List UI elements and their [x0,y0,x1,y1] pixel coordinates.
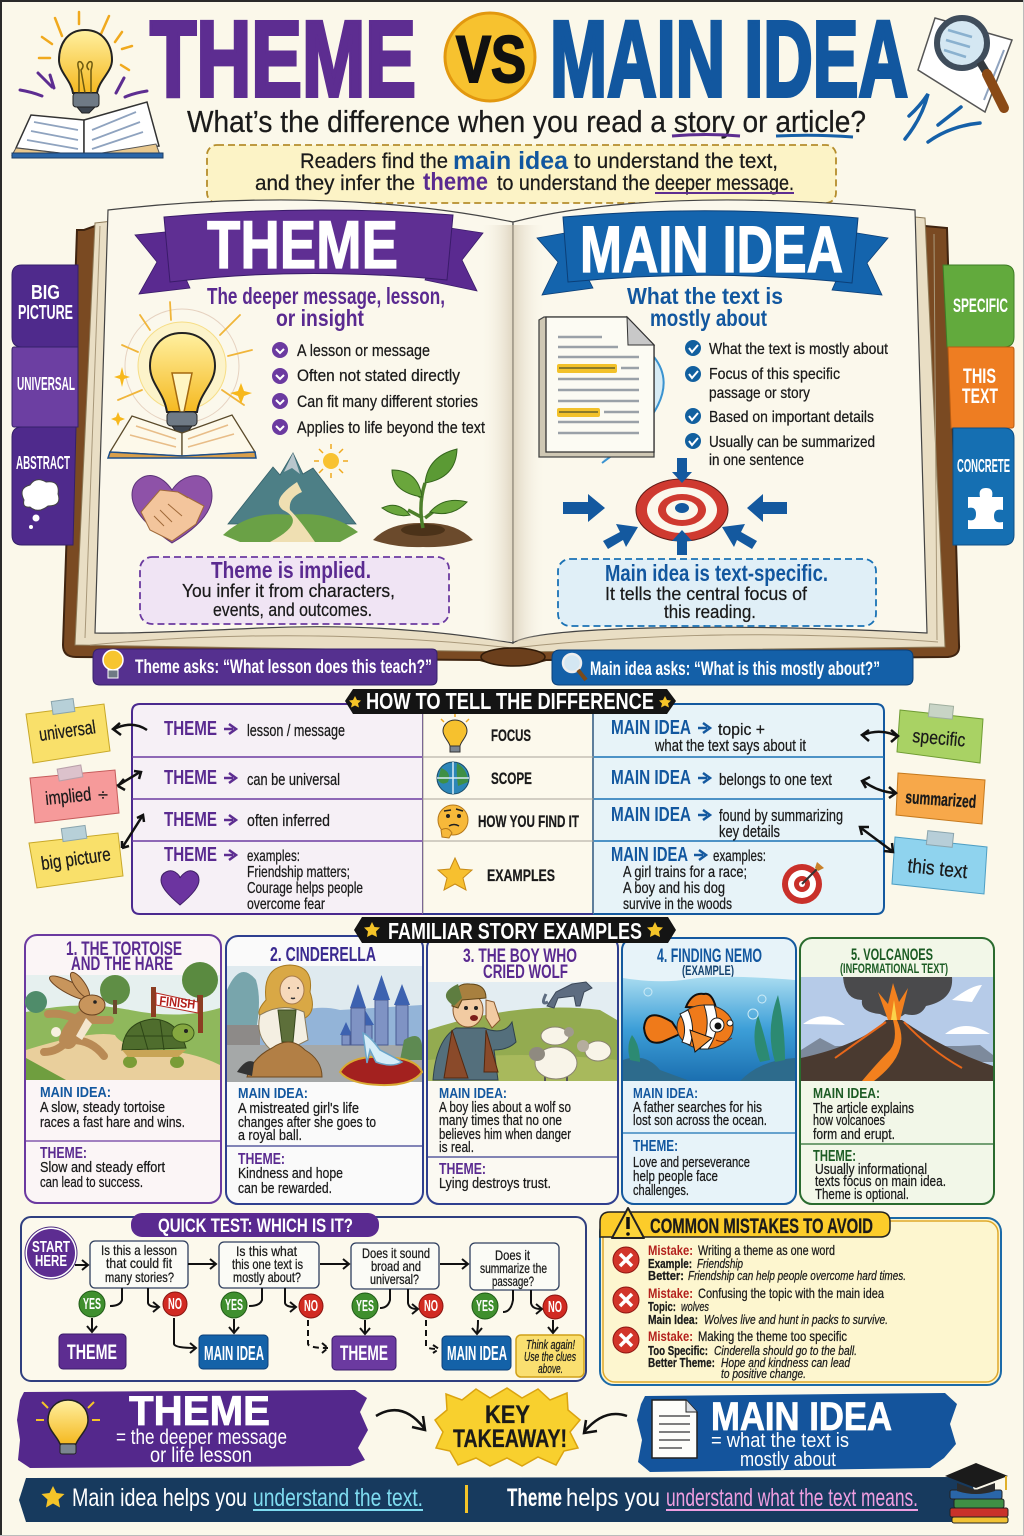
row: focus: FOCUS [491,726,531,745]
panel: card 1 tortoise and hare [25,935,221,1203]
question 4: Does it [495,1247,530,1263]
badge: key takeaway [435,1388,580,1466]
callout: readers find: Readers find the [300,150,448,173]
mistake 3: Too Specific: [648,1343,708,1358]
icon: glowing lightbulb on book [108,302,256,458]
banner: main idea takeaway [637,1393,957,1472]
question 3 [351,1243,439,1289]
checklist: theme: A lesson or message [297,341,430,360]
text: Lying destroys trust. [439,1175,551,1192]
tab: big picture: BIG [31,282,60,304]
mistake 3: to positive change. [721,1366,806,1381]
mistake 1: Writing a theme as one word [698,1242,835,1258]
text: changes after she goes to [238,1114,376,1131]
heading: 2. CINDERELLA [270,944,376,966]
callout: main idea is text-specific [558,559,876,626]
yes no badges: YES [225,1297,243,1314]
callout: theme is implied: events, and outcomes. [213,600,372,620]
row: examples: examples: [247,848,300,865]
question 2: Is this what [236,1243,297,1259]
badge: key takeaway: TAKEAWAY! [453,1425,567,1453]
text: Usually informational [815,1161,927,1178]
book clasp [481,648,545,666]
panel: card 5 volcanoes [800,938,994,1204]
mistake 1: Example: [648,1256,692,1271]
panel: common mistakes [600,1208,1001,1385]
text: THEME: [813,1148,856,1165]
checklist: theme: Applies to life beyond the text [297,418,485,437]
icon: highlighted document [539,317,664,463]
bottom bar: summary [19,1477,977,1522]
results: THEME [67,1341,117,1364]
mistake 2: Confusing the topic with the main idea [698,1285,884,1301]
text [227,1085,422,1197]
text: THEME: [439,1161,486,1178]
text: MAIN IDEA: [439,1085,507,1102]
text: A boy lies about a wolf so [439,1099,571,1116]
tab: concrete [953,428,1014,545]
callout: readers find: main idea [453,147,569,175]
callout: main idea is text-specific: Main idea is text-specific. [605,560,828,586]
heading: deeper message [207,283,445,331]
icon: bulb [36,1400,100,1454]
text [26,1084,220,1191]
checklist: theme: Often not stated directly [297,366,460,385]
text: races a fast hare and wins. [40,1114,185,1131]
tabs: right side [943,265,1014,545]
mistake 3: Better Theme: [648,1355,715,1370]
row: scope: THEME [164,767,217,789]
bottom bar: summary: Theme [507,1484,562,1512]
row: scope [164,762,832,794]
checklist: main idea: Usually can be summarized [709,434,875,451]
text [623,1085,795,1199]
ribbon: THEME [135,207,483,294]
text: THEME: [633,1138,678,1155]
sticky: this text: this text [906,855,969,883]
callout: readers find: to understand the [497,172,650,195]
badge: VS: VS [456,22,526,96]
text: Slow and steady effort [40,1159,166,1176]
icon: magnifying glass over paper [918,18,1012,112]
callout: theme is implied [140,557,449,624]
yes no badges: NO [304,1298,318,1315]
text: can be rewarded. [238,1180,332,1197]
banner: theme takeaway: or life lesson [150,1444,252,1467]
panel: main idea page [537,211,888,626]
tab: this text [948,347,1014,428]
text: A father searches for his [633,1099,762,1116]
text: The article explains [813,1100,914,1117]
text [801,1085,993,1203]
text: MAIN IDEA: [238,1085,308,1102]
row: focus [164,714,806,755]
heading: what the text is: mostly about [650,305,767,331]
table background [132,704,423,914]
callout: theme is implied: You infer it from characters, [182,581,395,601]
row: examples: MAIN IDEA [611,844,688,866]
heading: deeper message: or insight [276,305,364,331]
sticky: specific: specific [912,726,966,752]
start here [25,1227,77,1279]
panel: open book [63,200,959,665]
callout: theme is implied: Theme is implied. [211,557,371,583]
arrow: theme to takeaway [376,1410,425,1430]
row: how you find it: MAIN IDEA [611,804,691,826]
question 2: mostly about? [233,1269,301,1285]
panel: theme page [108,207,485,624]
mistake 3 [613,1327,857,1381]
heading: what the text is [627,283,783,331]
text: texts focus on main idea. [815,1173,946,1190]
text: A mistreated girl's life [238,1100,359,1117]
heading [66,939,182,975]
row: scope: MAIN IDEA [611,767,691,789]
row: how you find it: often inferred [247,811,330,830]
banner: main idea takeaway: mostly about [740,1449,836,1471]
heading: 5. VOLCANOES [851,945,933,964]
bar: theme asks [93,649,437,685]
bottom bar: summary: understand the text. [253,1484,423,1512]
row: focus: what the text says about it [654,736,806,755]
question 4: summarize the [480,1260,547,1276]
row: examples: overcome fear [247,896,326,913]
callout: readers find: deeper message. [655,172,794,195]
question 2: this one text is [232,1256,303,1272]
results: MAIN IDEA [447,1343,507,1365]
heading: what the text is: What the text is [627,283,783,309]
checklist: main idea: in one sentence [709,452,804,469]
results: THEME [340,1342,388,1365]
sticky: big picture [29,825,123,888]
panel: quick test flowchart [21,1213,586,1381]
mistake 1: Friendship [697,1256,743,1271]
checklist: main idea: Based on important details [709,409,874,426]
question 3: Does it sound [362,1245,430,1261]
banner: theme takeaway: THEME [129,1387,270,1434]
text: believes him when danger [439,1126,571,1143]
arrows: table to right notes [860,730,898,852]
row: how you find it: HOW YOU FIND IT [478,812,579,831]
icon: sprout [373,449,473,547]
row: how you find it [164,804,843,841]
heading: 4. FINDING NEMO [657,946,762,967]
checklist: main idea: passage or story [709,385,810,402]
row: examples: examples: [713,848,766,865]
heading: quick test: QUICK TEST: WHICH IS IT? [158,1216,353,1237]
notes: left sticky notes [26,699,123,888]
question 2 [219,1242,319,1288]
heading [657,946,762,978]
checklist: theme [272,341,485,437]
mistake 2: Wolves live and hunt in packs to survive. [704,1312,888,1327]
subtitle: What’s the difference when you read a story or article? [187,104,866,139]
callout: readers find [207,145,836,203]
text: THEME: [238,1151,285,1168]
illustration: cinderella, castle and slipper [227,965,422,1085]
text: Love and perseverance [633,1154,750,1171]
callout: readers find: theme [423,168,488,196]
row: how you find it: THEME [164,809,217,831]
results: Use the clues [524,1349,576,1364]
icon: target with arrows [563,458,787,555]
banner: main idea takeaway: = what the text is [711,1430,849,1452]
banner: theme takeaway [17,1387,368,1468]
tab: universal: UNIVERSAL [17,374,75,394]
text: a royal ball. [238,1127,302,1144]
icon: mountain path and sun [223,444,358,542]
text: is real. [439,1139,474,1156]
mistake 1: Mistake: [648,1242,693,1258]
text: form and erupt. [813,1126,895,1143]
tab: this text: THIS [963,365,996,388]
tab: this text: TEXT [962,385,998,408]
sticky: universal: universal [38,717,97,746]
yes no badges: NO [424,1298,438,1315]
icon: document [652,1400,697,1458]
arrows: left notes to table [113,723,147,848]
sticky: summarized: summarized [905,787,977,812]
page stacks [75,209,945,652]
question 1: many stories? [105,1269,174,1285]
checklist: theme: Can fit many different stories [297,392,478,411]
book cover [63,226,959,665]
row: examples: THEME [164,844,217,866]
illustration: hare and tortoise race: FINISH [159,993,196,1012]
heading: common mistakes [600,1208,890,1238]
heading: (INFORMATIONAL TEXT) [840,960,948,976]
mistake 3: Cinderella should go to the ball. [714,1343,857,1358]
question 1: that could fit [106,1255,172,1271]
bar: main idea asks [552,650,913,685]
bottom bar: summary: helps you [566,1484,660,1512]
heading [463,946,577,983]
heading: 1. THE TORTOISE [66,939,182,960]
mistake 2: Topic: [648,1299,676,1314]
sticky: this text [892,831,987,894]
question 4: passage? [492,1273,534,1289]
results: Think again! [526,1337,575,1352]
illustration: hare and tortoise race [25,962,220,1080]
mistake 2: Mistake: [648,1285,693,1301]
banner: theme takeaway: = the deeper message [116,1426,287,1449]
arrow: main idea to takeaway [584,1414,627,1433]
mistake 3: Mistake: [648,1328,693,1344]
text: MAIN IDEA: [40,1084,111,1101]
mistake 2: wolves [681,1299,709,1314]
text: MAIN IDEA: [633,1085,698,1102]
callout: readers find: and they infer the [255,172,415,195]
row: how you find it: key details [719,822,780,841]
flow arrows [75,1259,558,1353]
panel: card 4 finding nemo [622,938,796,1204]
decorative blue strokes [905,94,980,142]
heading: 3. THE BOY WHO [463,946,577,967]
ribbon: MAIN IDEA: MAIN IDEA [580,212,843,286]
row: how you find it: found by summarizing [719,806,843,825]
yes no badges: YES [356,1298,374,1315]
heading: familiar story examples: FAMILIAR STORY EXAMPLES [388,918,642,944]
tab: big picture: PICTURE [18,302,73,324]
checklist: main idea [685,340,888,469]
checklist: main idea: Focus of this specific [709,366,840,383]
left page [95,200,513,643]
text: how volcanoes [813,1112,885,1129]
yes no badges: NO [168,1296,182,1313]
callout: main idea is text-specific: It tells the central focus of [605,584,808,604]
text [428,1085,617,1192]
text: many times that no one [439,1112,562,1129]
callout: main idea is text-specific: this reading. [664,602,756,622]
tab: universal [12,347,78,427]
text: A slow, steady tortoise [40,1099,165,1116]
question 3: universal? [370,1271,419,1287]
heading: AND THE HARE [71,954,173,975]
mistake 1 [613,1242,906,1283]
sticky: big picture: big picture [40,844,112,875]
badge: key takeaway: KEY [485,1401,530,1429]
mistake 2 [613,1285,888,1327]
banner: main idea takeaway: MAIN IDEA [711,1395,892,1439]
row: focus: THEME [164,718,217,740]
bar: theme asks: Theme asks: “What lesson does this teach?” [135,657,432,678]
tab: big picture [12,265,78,347]
row: scope: belongs to one text [719,770,832,789]
icon: books and graduation cap [945,1463,1008,1523]
mistake 2: Main Idea: [648,1312,698,1327]
table: how to tell the difference [132,704,884,914]
row: examples [161,844,824,913]
sticky: implied: ÷ [98,787,108,804]
checklist: main idea: What the text is mostly about [709,341,888,358]
icon: lightbulb and open book [12,12,163,158]
mistake 3: Hope and kindness can lead [721,1355,851,1370]
row: examples: Friendship matters; [247,864,350,881]
illustration: erupting volcano [801,977,993,1081]
yes no badges [79,1291,567,1319]
ribbon: THEME: THEME [207,207,398,283]
title: THEME: THEME [150,0,416,119]
mistake 1: Friendship can help people overcome hard times. [688,1268,906,1283]
question 4 [470,1243,559,1290]
row: scope: SCOPE [491,769,532,788]
panel: card 2 cinderella [226,936,423,1204]
notes: right sticky notes [892,704,987,894]
row: examples: Courage helps people [247,880,363,897]
row: examples: A boy and his dog [623,880,725,897]
mistake 3: Making the theme too specific [698,1328,847,1344]
sticky: specific [897,704,983,763]
row: focus: topic + [718,720,765,739]
row: scope: can be universal [247,770,340,789]
results [59,1334,584,1377]
yes no badges: YES [83,1296,101,1313]
sticky: universal [26,699,110,763]
heading: CRIED WOLF [483,962,568,983]
tab: abstract [12,427,76,545]
text: can lead to success. [40,1174,143,1191]
row: examples: A girl trains for a race; [623,864,747,881]
row: focus: lesson / message [247,721,345,740]
start here: START [32,1239,70,1256]
sticky: summarized [896,773,985,824]
yes no badges: NO [548,1299,562,1316]
heading: deeper message: The deeper message, lesson, [207,283,445,309]
row: focus: MAIN IDEA [611,717,691,739]
text: THEME: [40,1145,87,1162]
results: above. [538,1361,563,1376]
mistake 1: Better: [648,1268,684,1283]
text: help people face [633,1168,718,1185]
sticky: implied: implied [44,784,92,810]
question 1: Is this a lesson [101,1242,177,1258]
callout: readers find: to understand the text, [574,150,778,173]
heading: how to tell the difference: HOW TO TELL THE DIFFERENCE [366,688,654,714]
heading: (EXAMPLE) [682,962,734,978]
tab: abstract: ABSTRACT [16,453,70,473]
text: Theme is optional. [815,1186,909,1203]
bottom bar: summary: understand what the text means. [666,1484,918,1512]
question 1 [90,1241,188,1288]
yes no badges: YES [476,1298,494,1315]
row: examples: survive in the woods [623,896,732,913]
text: MAIN IDEA: [813,1085,880,1102]
icon: heart with handshake [132,476,212,543]
text: lost son across the ocean. [633,1112,767,1129]
row: examples: EXAMPLES [487,866,555,885]
start here: HERE [35,1253,67,1270]
sticky: implied [30,765,119,823]
question 3: broad and [371,1258,421,1274]
illustration: boy, wolf and sheep [428,982,617,1081]
panel: card 3 boy who cried wolf [427,936,618,1204]
text: challenges. [633,1182,689,1199]
bar: main idea asks: Main idea asks: “What is this mostly about?” [590,659,880,680]
results: MAIN IDEA [204,1343,264,1365]
right page [513,200,927,643]
tabs: left side [12,265,78,545]
text: Kindness and hope [238,1165,343,1182]
tab: specific [943,265,1014,347]
badge: VS [445,13,535,101]
illustration: clownfish underwater [623,977,795,1081]
bottom bar: summary: Main idea helps you [72,1484,247,1512]
heading: common mistakes: COMMON MISTAKES TO AVOID [650,1215,873,1238]
heading [840,945,948,976]
